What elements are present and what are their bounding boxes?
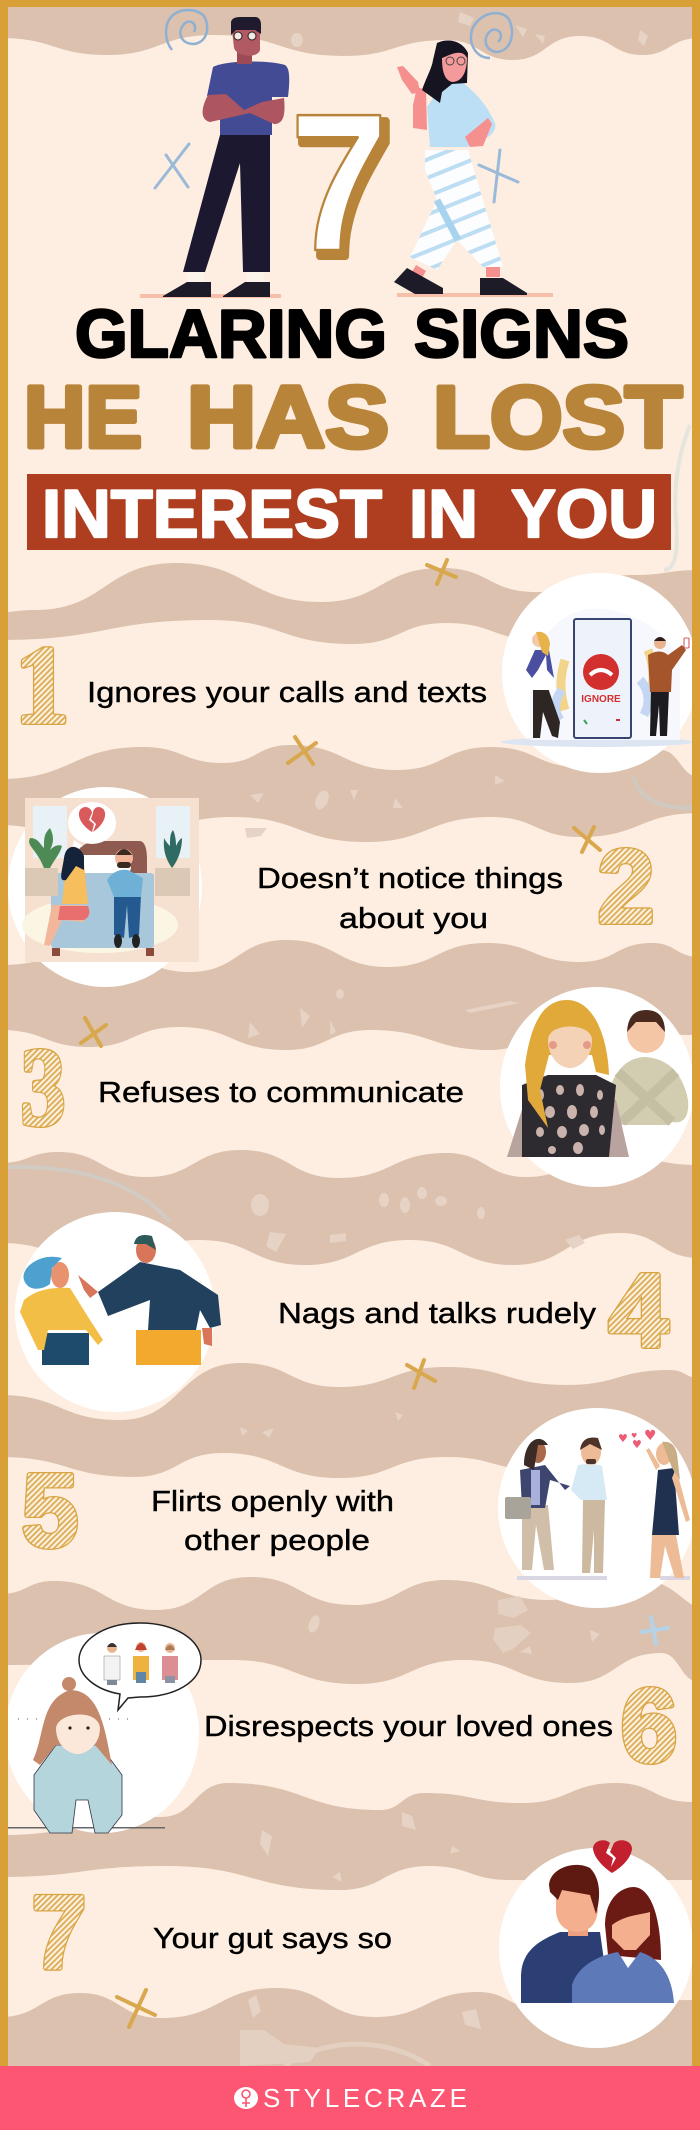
number 2: 2 bbox=[598, 829, 654, 944]
dotted lines bbox=[18, 1718, 134, 1720]
title banner: interest in you: IN bbox=[409, 476, 478, 552]
circle illustration: couple in bedroom bbox=[8, 787, 202, 987]
hearts: ♥ bbox=[632, 1438, 642, 1451]
number 4: 4 bbox=[609, 1253, 668, 1368]
number 4: 4 bbox=[609, 1253, 668, 1368]
number seven: 7 bbox=[290, 73, 388, 292]
sign 7 bbox=[32, 1840, 693, 2048]
sign 3 bbox=[21, 987, 694, 1187]
number 6: 6 bbox=[621, 1668, 677, 1783]
gold cross marks bbox=[81, 560, 600, 2027]
illustration: arguing couple with big seven bbox=[140, 10, 553, 298]
title banner: interest in you bbox=[27, 474, 671, 552]
circle illustration: ignored call: IGNORE bbox=[581, 694, 621, 705]
label bbox=[151, 1486, 394, 1557]
number 3: 3 bbox=[21, 1026, 65, 1148]
footer bar bbox=[0, 2066, 700, 2130]
number 1: 1 bbox=[15, 624, 69, 746]
number seven: 7 bbox=[294, 79, 394, 298]
sign 5 bbox=[22, 1408, 696, 1608]
label: Your gut says so bbox=[153, 1923, 392, 1955]
number 5: 5 bbox=[22, 1453, 78, 1568]
title banner: interest in you: INTEREST bbox=[42, 476, 382, 552]
brand name: STYLECRAZE bbox=[263, 2083, 467, 2113]
man bbox=[582, 1500, 605, 1573]
sign 6 bbox=[5, 1623, 677, 1833]
sign 2 bbox=[8, 787, 654, 987]
hearts bbox=[618, 1428, 657, 1451]
sign 4 bbox=[15, 1212, 668, 1412]
title: glaring signs: SIGNS bbox=[414, 296, 629, 372]
title: he has lost bbox=[24, 369, 682, 466]
man lying bbox=[114, 895, 141, 938]
circle illustration: flirting man bbox=[498, 1408, 696, 1608]
hearts: ♥ bbox=[631, 1432, 637, 1440]
title: he has lost: LOST bbox=[433, 369, 682, 466]
circle illustration: man yelling at woman bbox=[15, 1212, 221, 1412]
woman seated bbox=[44, 905, 85, 946]
broken heart icon bbox=[593, 1840, 632, 1873]
small figures bbox=[104, 1642, 178, 1685]
title: he has lost: HE bbox=[24, 369, 142, 466]
woman bbox=[394, 40, 527, 295]
number 3: 3 bbox=[21, 1026, 65, 1148]
phone bbox=[574, 619, 631, 738]
number 2: 2 bbox=[598, 829, 654, 944]
label: about you bbox=[339, 903, 488, 935]
circle illustration: ignored call bbox=[501, 573, 698, 773]
number 7: 7 bbox=[32, 1875, 86, 1990]
label: Refuses to communicate bbox=[98, 1077, 464, 1109]
label: Doesn’t notice things bbox=[257, 863, 563, 895]
number 6: 6 bbox=[621, 1668, 677, 1783]
ground shadow bbox=[140, 294, 281, 298]
number 5: 5 bbox=[22, 1453, 78, 1568]
right woman bbox=[650, 1535, 684, 1578]
number 1: 1 bbox=[15, 624, 69, 746]
thought bubble bbox=[79, 1623, 201, 1710]
title: he has lost: HAS bbox=[187, 369, 389, 466]
label: Nags and talks rudely bbox=[278, 1298, 597, 1330]
label bbox=[257, 863, 563, 935]
left woman bbox=[522, 1505, 554, 1570]
title: glaring signs bbox=[75, 296, 629, 372]
label: Ignores your calls and texts bbox=[87, 677, 487, 709]
number 7: 7 bbox=[32, 1875, 86, 1990]
label: Flirts openly with bbox=[151, 1486, 394, 1518]
logo icon bbox=[234, 2087, 258, 2109]
hearts: ♥ bbox=[644, 1428, 657, 1444]
title: glaring signs: GLARING bbox=[75, 296, 387, 372]
hearts: ♥ bbox=[618, 1432, 628, 1445]
blue spirals bbox=[166, 10, 512, 58]
label: Disrespects your loved ones bbox=[204, 1711, 613, 1743]
circle illustration: sad couple bbox=[499, 1848, 693, 2048]
label: other people bbox=[184, 1525, 370, 1557]
man bbox=[163, 17, 289, 297]
title banner: interest in you: YOU bbox=[511, 476, 657, 552]
sign 1 bbox=[15, 573, 698, 773]
blue plus mark bbox=[641, 1617, 668, 1644]
blue crosses bbox=[155, 144, 518, 202]
woman on phone bbox=[533, 688, 560, 738]
man with phone bbox=[650, 690, 669, 736]
circle illustration: worried woman bbox=[5, 1623, 201, 1833]
circle illustration: arms crossed bbox=[500, 987, 694, 1187]
